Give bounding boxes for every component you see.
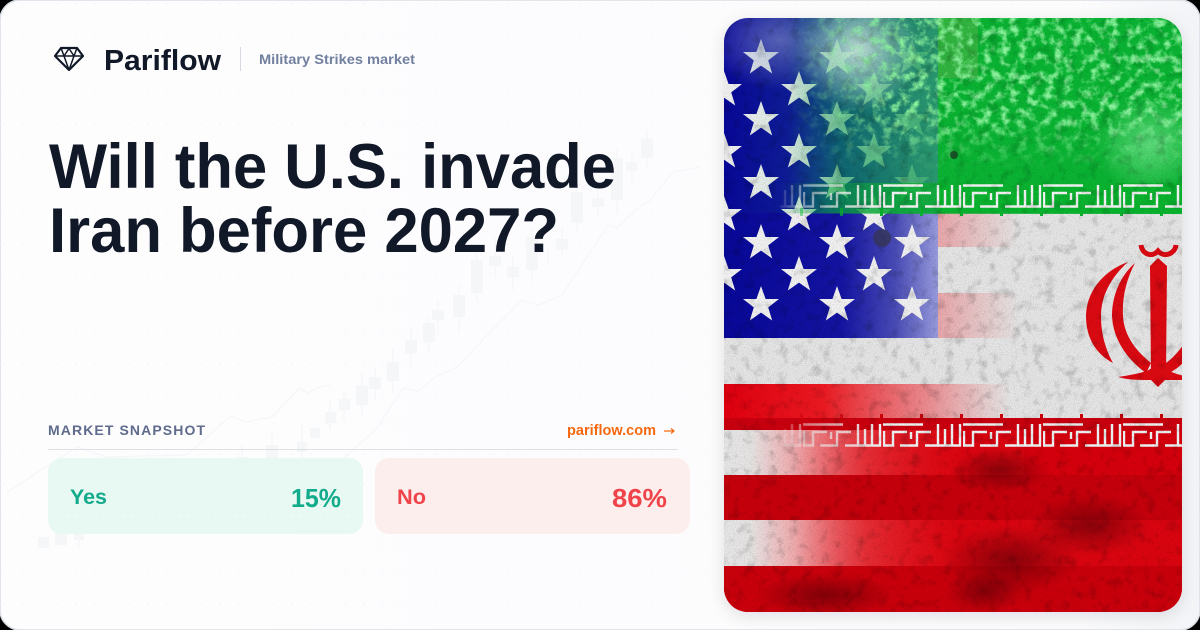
icon: diamond	[55, 48, 83, 70]
title: Will the U.S. invade	[49, 132, 616, 202]
US canton with stars	[724, 18, 938, 338]
market category: Military Strikes market	[259, 51, 415, 67]
title: Iran before 2027?	[49, 196, 559, 266]
image: blended US and Iran flags	[724, 18, 1182, 612]
US upper stripes	[724, 384, 1024, 418]
panel: no outcome: No	[397, 486, 426, 509]
panel: no outcome	[375, 458, 690, 534]
panel: yes outcome: Yes	[70, 486, 107, 509]
photo shadow	[724, 18, 1182, 612]
title	[49, 132, 616, 266]
market snapshot header	[48, 422, 678, 450]
no percentage: 86%	[612, 483, 667, 513]
icon: arrow	[664, 428, 674, 434]
brand header	[55, 45, 415, 77]
Iran emblem	[1086, 245, 1190, 387]
kufic border bands	[760, 184, 1182, 447]
weathered texture	[724, 18, 1182, 617]
link: pariflow.com: pariflow.com	[567, 423, 656, 439]
brand name: Pariflow	[104, 45, 221, 77]
yes percentage: 15%	[291, 483, 341, 513]
market snapshot header: MARKET SNAPSHOT	[48, 422, 205, 438]
red lower field	[724, 418, 1182, 612]
panel: yes outcome	[48, 458, 363, 534]
green field	[747, 18, 938, 213]
